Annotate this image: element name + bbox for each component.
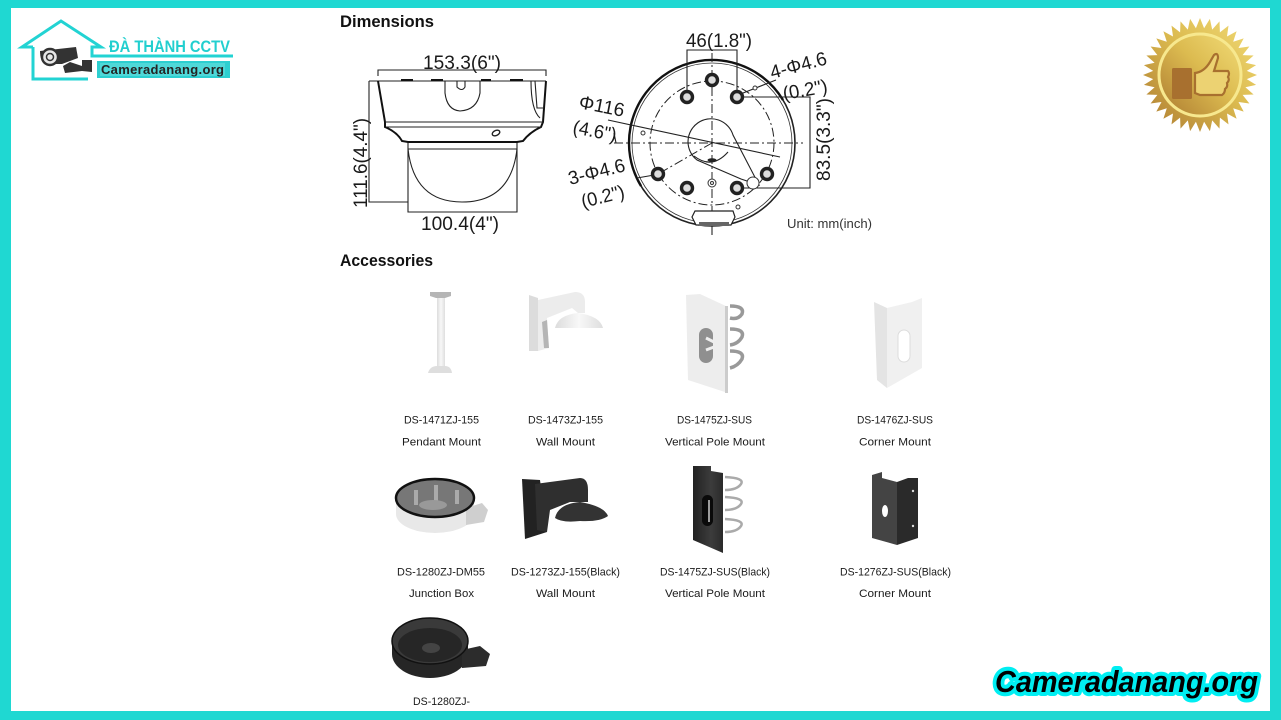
labels: row 2: DS-1475ZJ-SUS(Black) (660, 566, 770, 578)
dimension leaders (608, 50, 810, 188)
small screw holes (641, 86, 759, 209)
label: diameter: Φ116 (577, 92, 626, 122)
accessory: wall mount (529, 292, 603, 351)
label: upper hole inch: (0.2") (781, 76, 829, 105)
dimension lines (369, 70, 546, 212)
labels: row 1: DS-1476ZJ-SUS (857, 414, 933, 426)
heading: Accessories: Accessories (340, 251, 433, 270)
accessories grid (392, 292, 951, 708)
label: lower hole size: 3-Φ4.6 (566, 155, 627, 190)
labels: row 1: Corner Mount (859, 436, 931, 448)
labels: row 1: DS-1473ZJ-155 (528, 414, 603, 426)
label: upper hole size: 4-Φ4.6 (768, 49, 829, 84)
heading: Dimensions: Dimensions (340, 12, 434, 31)
labels: row 2: DS-1276ZJ-SUS(Black) (840, 566, 951, 578)
label: hole spacing: 46(1.8") (686, 31, 752, 52)
labels: row 2: Wall Mount (536, 588, 595, 600)
accessory: junction box (396, 479, 488, 533)
label: unit: Unit: mm(inch) (787, 216, 872, 231)
logo url badge: Cameradanang.org (101, 62, 224, 77)
labels: row 1: Pendant Mount (402, 436, 481, 448)
labels: row 2: Junction Box (409, 588, 475, 600)
label: diameter inch: (4.6") (571, 117, 618, 146)
drawing: camera side view (351, 53, 546, 235)
outer ring (629, 60, 795, 226)
bottom connector (692, 211, 735, 225)
logo name: ĐÀ THÀNH CCTV (109, 37, 231, 56)
labels: row 1 (402, 414, 933, 448)
labels: row 1: Wall Mount (536, 436, 595, 448)
drawing: camera bottom view (566, 31, 872, 235)
icon: house outline (22, 21, 233, 79)
icon: gold thumbs-up seal (1143, 18, 1257, 132)
labels: row 1: Vertical Pole Mount (665, 436, 765, 448)
accessory: black corner mount (872, 472, 918, 545)
accessory: black wall mount (522, 478, 608, 539)
accessory: black junction box (392, 618, 490, 678)
labels: row 2: Corner Mount (859, 588, 931, 600)
logo: Da Thanh CCTV (22, 21, 233, 79)
footer site name: Cameradanang.org (995, 664, 1258, 699)
keyhole cutout (688, 119, 759, 185)
accessory: pendant mount (428, 292, 452, 373)
accessory: black vertical pole mount (693, 466, 742, 553)
label: lower hole inch: (0.2") (579, 182, 627, 213)
labels: row 2: DS-1280ZJ-DM55 (397, 566, 485, 578)
labels: row 3: DS-1280ZJ- (413, 696, 470, 708)
label: base width: 100.4(4") (421, 214, 499, 235)
icon: security camera (40, 47, 92, 73)
label: height: 111.6(4.4") (351, 118, 372, 208)
camera body (378, 81, 546, 142)
label: hole distance: 83.5(3.3") (814, 98, 835, 181)
labels: row 2 (397, 566, 951, 600)
mounting holes (652, 74, 772, 194)
dome (408, 149, 517, 202)
labels: row 2: Vertical Pole Mount (665, 588, 765, 600)
labels: row 2: DS-1273ZJ-155(Black) (511, 566, 620, 578)
labels: row 1: DS-1471ZJ-155 (404, 414, 479, 426)
label: width: 153.3(6") (423, 53, 501, 74)
labels: row 1: DS-1475ZJ-SUS (677, 414, 752, 426)
inner bolt circle and axes (650, 81, 774, 205)
accessory: corner mount (874, 298, 922, 388)
accessory: vertical pole mount (686, 294, 742, 393)
